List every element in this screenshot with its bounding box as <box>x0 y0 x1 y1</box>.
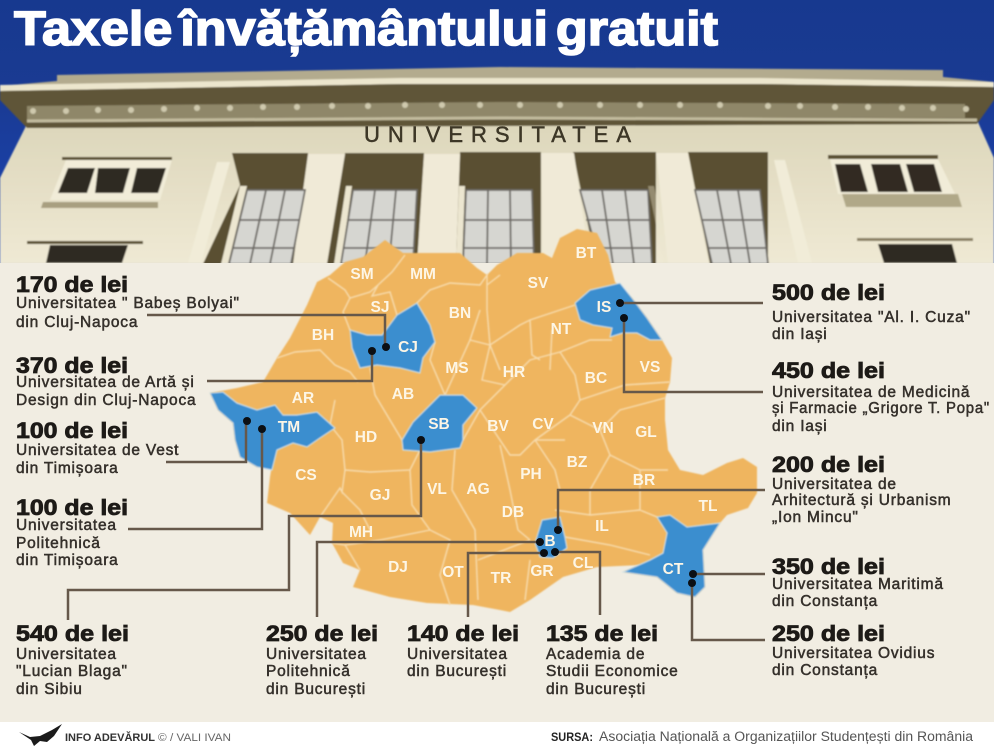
county labels: AR <box>292 390 314 407</box>
callout: 135 de lei: 135 de lei <box>546 621 658 646</box>
callout: 450 de lei: 450 de lei <box>772 358 885 383</box>
county labels: PH <box>520 466 542 483</box>
callout: 500 de lei: 500 de lei <box>772 280 885 305</box>
central recesses <box>203 153 308 264</box>
building photo <box>0 67 994 264</box>
callout: 450 de lei <box>772 358 990 435</box>
county labels: TR <box>491 570 511 587</box>
callout: 100 de lei Politehnica: Politehnică <box>16 535 101 552</box>
map of Romania <box>210 229 757 612</box>
county: CT <box>623 515 720 597</box>
callout: 370 de lei: Universitatea de Artă și <box>16 374 195 391</box>
callout: 100 de lei Politehnica: din Timișoara <box>16 552 119 569</box>
callout: 250 de lei Constanta: din Constanța <box>772 662 878 679</box>
county labels: VS <box>640 359 660 376</box>
callout: 250 de lei Constanta <box>772 621 935 679</box>
county labels: CJ <box>398 339 418 356</box>
county: B <box>535 517 567 558</box>
callout: 250 de lei Bucuresti: Politehnică <box>266 663 351 680</box>
callout: 450 de lei: din Iași <box>772 418 828 435</box>
map silhouette <box>210 229 757 612</box>
county labels: B <box>544 533 556 550</box>
highlighted counties <box>210 283 720 597</box>
piers <box>293 154 345 264</box>
callout: 170 de lei <box>16 272 240 331</box>
callout: 100 de lei Vest <box>16 418 179 477</box>
county labels: AG <box>466 481 490 498</box>
callout: 100 de lei Vest: Universitatea de Vest <box>16 442 179 459</box>
callout: 540 de lei: 540 de lei <box>16 621 129 646</box>
county labels: VN <box>592 420 614 437</box>
county labels: MH <box>349 524 373 541</box>
callout: 135 de lei: Studii Economice <box>546 663 679 680</box>
callout: 250 de lei Bucuresti: 250 de lei <box>266 621 378 646</box>
county labels: TL <box>699 498 717 515</box>
footer credit: © / VALI IVAN <box>158 732 231 744</box>
county labels: GL <box>635 424 657 441</box>
county: SB <box>402 395 477 452</box>
callout: 250 de lei Bucuresti: Universitatea <box>266 646 367 663</box>
callout: 135 de lei: Academia de <box>546 646 645 663</box>
callout: 450 de lei: și Farmacie „Grigore T. Popa" <box>772 400 990 417</box>
callout: 100 de lei Vest: din Timișoara <box>16 460 119 477</box>
callout: 350 de lei: Universitatea Maritimă <box>772 576 944 593</box>
callout: 370 de lei: Design din Cluj-Napoca <box>16 392 196 409</box>
callout: 500 de lei: din Iași <box>772 326 828 343</box>
county labels: MS <box>445 360 469 377</box>
callout: 170 de lei: Universitatea " Babeș Bolyai" <box>16 295 240 312</box>
county labels: CV <box>532 416 554 433</box>
county labels: BZ <box>567 454 588 471</box>
county labels: HR <box>503 364 525 381</box>
callout: 500 de lei <box>772 280 971 343</box>
county labels: CL <box>573 555 593 572</box>
callout: 200 de lei: Arhitectură și Urbanism <box>772 492 951 509</box>
callout: 135 de lei: din București <box>546 681 646 698</box>
county labels: SJ <box>371 299 389 316</box>
county labels: DJ <box>388 559 408 576</box>
callout: 100 de lei Politehnica: Universitatea <box>16 517 117 534</box>
callout: 540 de lei: din Sibiu <box>16 681 83 698</box>
county: CJ <box>350 303 435 373</box>
county labels: BT <box>576 245 597 262</box>
callout: 100 de lei Politehnica <box>16 495 128 569</box>
callout: 140 de lei: 140 de lei <box>407 621 519 646</box>
county: TM <box>210 392 335 470</box>
callout: 200 de lei: „Ion Mincu" <box>772 509 859 526</box>
callout: 250 de lei Constanta: Universitatea Ovidius <box>772 645 935 662</box>
callout: 200 de lei <box>772 452 951 526</box>
callout: 250 de lei Bucuresti: din București <box>266 681 366 698</box>
callout: 170 de lei: din Cluj-Napoca <box>16 314 138 331</box>
county labels: OT <box>442 564 464 581</box>
county labels: BH <box>312 327 334 344</box>
callout: 500 de lei: Universitatea "Al. I. Cuza" <box>772 309 971 326</box>
callout: 540 de lei: Universitatea <box>16 646 117 663</box>
right windows <box>828 155 938 159</box>
county labels: GR <box>530 563 554 580</box>
footer credit <box>65 731 231 744</box>
county labels: MM <box>410 266 436 283</box>
callout: 370 de lei <box>16 353 196 409</box>
callout: 135 de lei <box>546 621 679 698</box>
county labels: IL <box>595 518 609 535</box>
callout: 200 de lei: Universitatea de <box>772 476 897 493</box>
callout: 100 de lei Vest: 100 de lei <box>16 418 128 443</box>
county labels: BV <box>487 418 509 435</box>
callout: 140 de lei: Universitatea <box>407 646 508 663</box>
callout: 250 de lei Constanta: 250 de lei <box>772 621 885 646</box>
county: IS <box>575 283 662 340</box>
county labels: HD <box>355 429 377 446</box>
location dots <box>243 299 697 587</box>
footer credit: INFO ADEVĂRUL <box>65 731 155 744</box>
cream panel <box>0 263 994 722</box>
inscription UNIVERSITATEA: UNIVERSITATEA <box>364 122 631 147</box>
title: Taxele învățământului gratuit <box>14 3 718 56</box>
panes <box>229 190 768 264</box>
county labels <box>278 245 717 587</box>
callout: 250 de lei Bucuresti <box>266 621 378 698</box>
leader lines <box>68 303 765 640</box>
county labels: SM <box>350 266 374 283</box>
county borders <box>277 255 670 605</box>
county labels: GJ <box>370 487 390 504</box>
county labels: CS <box>295 467 317 484</box>
county labels: TM <box>278 419 300 436</box>
county labels: SV <box>528 275 549 292</box>
county labels: IS <box>597 299 611 316</box>
footer source: Asociația Națională a Organizațiilor Studențești din România <box>599 729 974 744</box>
footer source: SURSA: <box>551 730 593 744</box>
callout: 540 de lei: "Lucian Blaga" <box>16 663 128 680</box>
county labels: BR <box>633 472 655 489</box>
callout: 350 de lei: 350 de lei <box>772 554 885 579</box>
sky background <box>0 0 994 264</box>
callout: 170 de lei: 170 de lei <box>16 272 128 297</box>
callout: 140 de lei <box>407 621 519 680</box>
strips <box>188 162 230 263</box>
callout: 450 de lei: Universitatea de Medicină <box>772 384 970 401</box>
county labels: BC <box>585 370 607 387</box>
county labels: SB <box>428 416 450 433</box>
callout: 370 de lei: 370 de lei <box>16 353 128 378</box>
callout: 200 de lei: 200 de lei <box>772 452 885 477</box>
left windows <box>62 157 172 160</box>
icon: eagle logo <box>19 724 62 746</box>
county labels: CT <box>663 561 684 578</box>
county labels: AB <box>392 386 414 403</box>
callout: 350 de lei: din Constanța <box>772 593 878 610</box>
county labels: BN <box>449 305 471 322</box>
county labels: VL <box>427 481 447 498</box>
county labels: DB <box>502 504 524 521</box>
callout: 100 de lei Politehnica: 100 de lei <box>16 495 128 520</box>
callout: 540 de lei <box>16 621 129 698</box>
callout: 140 de lei: din București <box>407 663 507 680</box>
callout: 350 de lei <box>772 554 944 610</box>
county labels: NT <box>551 321 572 338</box>
